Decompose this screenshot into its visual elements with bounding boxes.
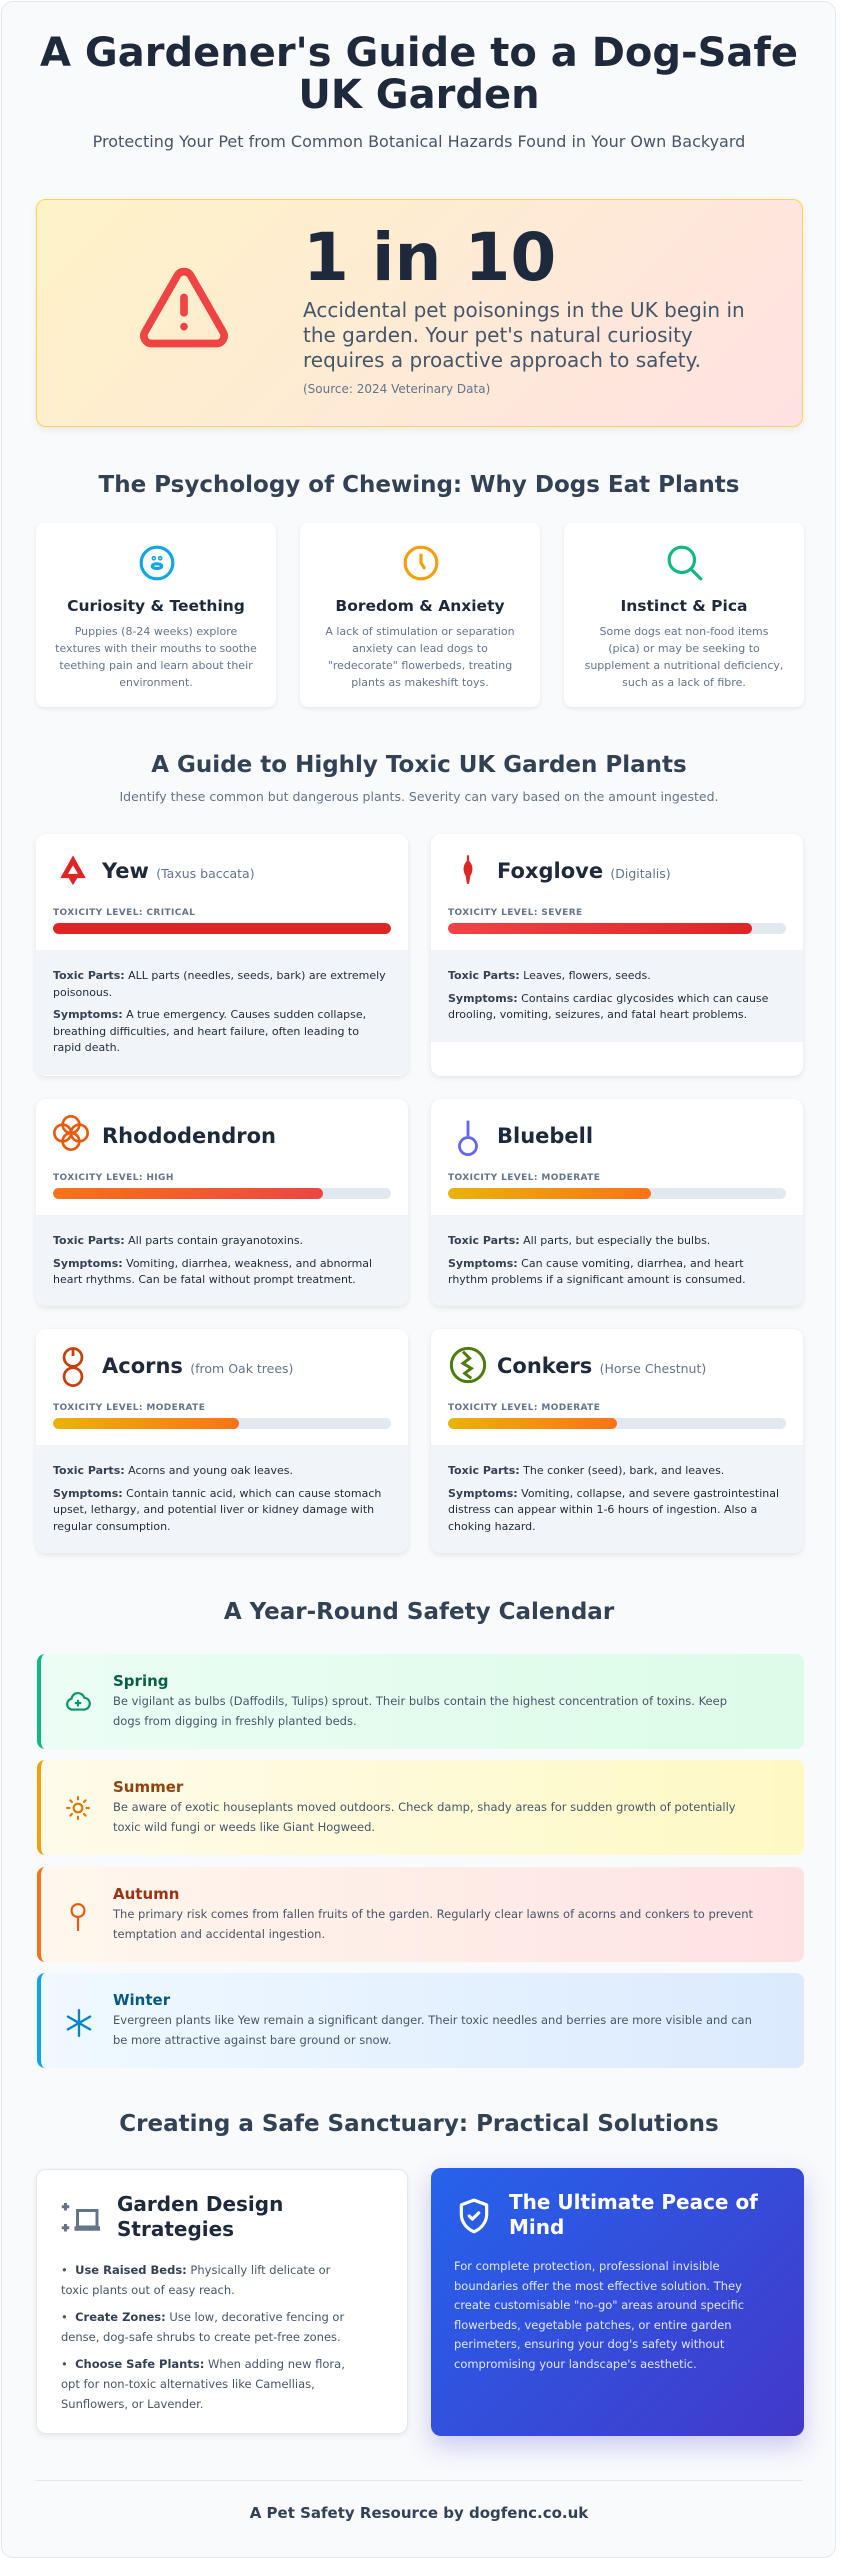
card: curiosity xyxy=(36,523,276,707)
card: instinct xyxy=(564,523,804,707)
card: curiosity: textures with their mouths to soothe teething pain and learn about their environment. xyxy=(55,642,257,689)
card: boredom: Boredom & Anxiety xyxy=(335,597,505,615)
card: conkers: Toxic Parts: The conker (seed), bark, and leaves. xyxy=(448,1464,724,1477)
stat text: Accidental pet poisonings in the UK begin in the garden. Your pet's natural curiosity requires a proactive approach to safety. xyxy=(303,298,745,372)
card: foxglove xyxy=(431,834,803,1076)
icon: bluebell xyxy=(458,1120,478,1156)
calendar: winter: Winter xyxy=(113,1991,170,2009)
card: bluebell: TOXICITY LEVEL: MODERATE xyxy=(448,1173,600,1183)
heading: solutions: Creating a Safe Sanctuary: Practical Solutions xyxy=(119,2111,719,2137)
calendar: winter: Evergreen plants like Yew remain a significant danger. Their toxic needles and berries are more visible and can be more attractive against bare ground or snow. xyxy=(113,2013,752,2047)
icon: rhododendron xyxy=(53,1115,89,1151)
footer: A Pet Safety Resource by dogfenc.co.uk xyxy=(250,2504,588,2522)
card: boredom: A lack of stimulation or separation anxiety can lead dogs to "redecorate" flowerbeds, treating plants as makeshift toys. xyxy=(325,625,515,689)
icon: autumn xyxy=(70,1903,86,1931)
card: yew: Toxic Parts: ALL parts (needles, seeds, bark) are extremely poisonous. xyxy=(53,969,386,998)
title xyxy=(40,30,798,118)
card: curiosity: Puppies (8-24 weeks) explore xyxy=(75,625,237,638)
heading: toxic plants: A Guide to Highly Toxic UK Garden Plants xyxy=(151,752,687,778)
card: acorns xyxy=(36,1329,408,1553)
bullet list: • Choose Safe Plants: When adding new flora, opt for non-toxic alternatives like Camellias, Sunflowers, or Lavender. xyxy=(61,2357,345,2411)
icon: spring xyxy=(66,1692,91,1711)
card: acorns: TOXICITY LEVEL: MODERATE xyxy=(53,1403,205,1413)
card: bluebell: Toxic Parts: All parts, but especially the bulbs. xyxy=(448,1234,710,1247)
calendar: autumn: The primary risk comes from fallen fruits of the garden. Regularly clear lawns of acorns and conkers to prevent temptation and accidental ingestion. xyxy=(113,1907,753,1941)
peace text: For complete protection, professional invisible boundaries offer the most effective solution. They create customisable "no-go" areas around specific flowerbeds, vegetable patches, or entire garden perimeters, ensuring your dog's safety without compromising your landscape's aesthetic. xyxy=(454,2259,744,2370)
calendar: autumn xyxy=(37,1867,804,1962)
card: bluebell: Symptoms: Can cause vomiting, diarrhea, and heart rhythm problems if a significant amount is consumed. xyxy=(448,1256,746,1286)
card: conkers: Symptoms: Vomiting, collapse, and severe gastrointestinal distress can appear within 1-6 hours of ingestion. Also a choking hazard. xyxy=(448,1486,779,1532)
card: yew xyxy=(36,834,408,1076)
icon: design xyxy=(62,2203,100,2232)
peace title: The Ultimate Peace of Mind xyxy=(509,2190,758,2239)
icon: snowflake xyxy=(66,2009,92,2037)
card: rhododendron: Rhododendron xyxy=(102,1124,276,1148)
stat number: 1 in 10 xyxy=(303,219,556,296)
card: curiosity: Curiosity & Teething xyxy=(67,597,245,615)
card: instinct: Instinct & Pica xyxy=(620,597,748,615)
calendar: summer: Summer xyxy=(113,1778,183,1796)
card: bluebell xyxy=(431,1099,803,1306)
card: rhododendron: Symptoms: Vomiting, diarrhea, weakness, and abnormal heart rhythms. Can be fatal without prompt treatment. xyxy=(53,1256,372,1286)
card: instinct: Some dogs eat non-food items (pica) or may be seeking to supplement a nutritional deficiency, such as a lack of fibre. xyxy=(585,625,783,689)
card: rhododendron xyxy=(36,1099,408,1306)
garden title: Strategies xyxy=(117,2217,234,2241)
calendar: autumn: Autumn xyxy=(113,1885,179,1903)
panel: garden design xyxy=(36,2169,408,2434)
garden title: Garden Design xyxy=(117,2192,283,2216)
card: yew: Yew (Taxus baccata) xyxy=(102,859,255,883)
card: conkers: Conkers (Horse Chestnut) xyxy=(497,1354,706,1378)
bullet list: • Create Zones: Use low, decorative fencing or dense, dog-safe shrubs to create pet-free zones. xyxy=(61,2310,344,2344)
bullet list: • Use Raised Beds: Physically lift delicate or toxic plants out of easy reach. xyxy=(61,2263,330,2297)
heading: calendar: A Year-Round Safety Calendar xyxy=(224,1599,614,1625)
title: A Gardener's Guide to a Dog-Safe xyxy=(40,30,798,76)
calendar: spring: Spring xyxy=(113,1672,168,1690)
card: rhododendron: TOXICITY LEVEL: HIGH xyxy=(53,1173,174,1183)
icon: sun xyxy=(66,1796,90,1820)
card: foxglove: TOXICITY LEVEL: SEVERE xyxy=(448,908,583,918)
subheading: Identify these common but dangerous plants. Severity can vary based on the amount ingested. xyxy=(120,789,718,804)
garden title xyxy=(117,2192,283,2241)
card: conkers xyxy=(431,1329,803,1553)
calendar: summer xyxy=(37,1760,804,1855)
icon: yew xyxy=(60,856,86,885)
card: yew: Symptoms: A true emergency. Causes sudden collapse, breathing difficulties, and heart failure, often leading to xyxy=(53,1008,366,1038)
card: rhododendron: Toxic Parts: All parts contain grayanotoxins. xyxy=(53,1234,303,1247)
card: bluebell: Bluebell xyxy=(497,1124,593,1148)
icon: acorn xyxy=(62,1347,84,1387)
bullet list xyxy=(61,2263,345,2411)
calendar: summer: Be aware of exotic houseplants moved outdoors. Check damp, shady areas for sudden growth of potentially toxic wild fungi or weeds like Giant Hogweed. xyxy=(113,1800,736,1834)
card: foxglove: Symptoms: Contains cardiac glycosides which can cause drooling, vomiting, seizures, and fatal heart problems. xyxy=(448,992,768,1021)
card: foxglove: Toxic Parts: Leaves, flowers, seeds. xyxy=(448,969,651,982)
panel: peace of mind xyxy=(431,2168,804,2436)
card: yew: TOXICITY LEVEL: CRITICAL xyxy=(53,908,195,918)
calendar: winter xyxy=(37,1973,804,2068)
icon: clock xyxy=(404,546,438,580)
card: acorns: Toxic Parts: Acorns and young oak leaves. xyxy=(53,1464,293,1477)
icon: warning xyxy=(140,268,228,348)
icon: shield xyxy=(460,2198,488,2234)
icon: conker xyxy=(450,1346,486,1384)
icon: foxglove xyxy=(464,855,472,884)
subtitle: Protecting Your Pet from Common Botanical Hazards Found in Your Own Backyard xyxy=(93,132,745,151)
stat callout xyxy=(36,199,803,427)
card: conkers: TOXICITY LEVEL: MODERATE xyxy=(448,1403,600,1413)
card: acorns: Symptoms: Contain tannic acid, which can cause stomach upset, lethargy, and potential liver or kidney damage with regular consumption. xyxy=(53,1486,381,1532)
heading: psychology: The Psychology of Chewing: Why Dogs Eat Plants xyxy=(99,472,739,498)
calendar: spring: Be vigilant as bulbs (Daffodils, Tulips) sprout. Their bulbs contain the highest concentration of toxins. Keep dogs from digging in freshly planted beds. xyxy=(113,1694,727,1728)
card: yew: rapid death. xyxy=(53,1041,120,1054)
calendar: spring xyxy=(37,1654,804,1749)
card: boredom xyxy=(300,523,540,707)
icon: search xyxy=(668,546,702,580)
icon: face xyxy=(140,546,174,580)
card: acorns: Acorns (from Oak trees) xyxy=(102,1354,293,1378)
card: foxglove: Foxglove (Digitalis) xyxy=(497,859,671,883)
source: (Source: 2024 Veterinary Data) xyxy=(303,382,490,396)
title: UK Garden xyxy=(298,72,540,118)
